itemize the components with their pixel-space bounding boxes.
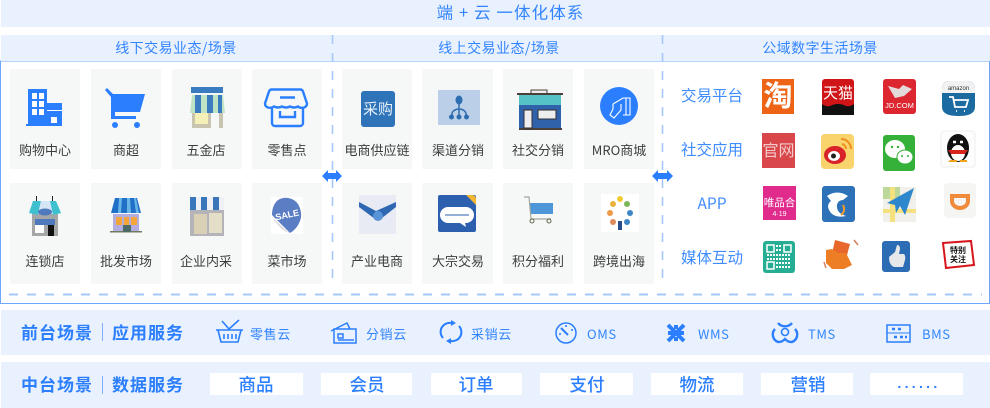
icon: didi bbox=[944, 183, 976, 218]
card: cross-border bbox=[584, 183, 654, 284]
icon: wechat bbox=[883, 135, 915, 171]
icon: jd bbox=[883, 79, 916, 114]
panel: public digital life bbox=[681, 73, 976, 277]
service: retail cloud bbox=[216, 320, 291, 343]
icon: jd: JD.COM bbox=[885, 101, 914, 110]
card: bulk trading bbox=[422, 183, 493, 284]
card: retail point: 零售点 bbox=[267, 140, 307, 159]
card: cross-border: 跨境出海 bbox=[593, 251, 645, 270]
icon: weibo bbox=[821, 134, 854, 169]
pill: more: ...... bbox=[897, 375, 941, 391]
pill: logistics: 物流 bbox=[680, 372, 714, 397]
card: vegetable market: SALE bbox=[274, 208, 300, 222]
icon: official site bbox=[762, 133, 795, 168]
icon: special follow bbox=[943, 241, 974, 268]
label: social apps: 社交应用 bbox=[681, 138, 743, 160]
service: purchasing cloud bbox=[441, 320, 512, 344]
icon: vip bbox=[763, 186, 796, 220]
card: industrial e-commerce bbox=[342, 183, 412, 284]
card: vegetable market: 菜市场 bbox=[267, 251, 307, 270]
title bar: 端 + 云 一体化体系 bbox=[437, 0, 584, 24]
icon: qq bbox=[941, 131, 975, 167]
card: wholesale market bbox=[91, 183, 161, 284]
card: social distribution: 社交分销 bbox=[512, 140, 564, 159]
service: bms bbox=[887, 324, 951, 343]
icon: phone shake bbox=[816, 233, 864, 277]
card: wholesale market: 批发市场 bbox=[100, 251, 152, 270]
card: points benefits bbox=[503, 183, 573, 284]
service: oms bbox=[556, 323, 617, 343]
icon: vip: 唯品合 bbox=[764, 195, 796, 210]
icon: special follow: 关注 bbox=[950, 254, 966, 265]
heading: data services: 数据服务 bbox=[112, 371, 184, 396]
card: industrial e-commerce: 产业电商 bbox=[351, 251, 403, 270]
panel: offline scenes bbox=[10, 69, 322, 284]
card: social distribution bbox=[503, 69, 573, 169]
label: trading platforms: 交易平台 bbox=[681, 84, 743, 106]
service: purchasing cloud: 采销云 bbox=[471, 324, 512, 343]
label: media interaction: 媒体互动 bbox=[681, 246, 743, 268]
pill: goods bbox=[210, 372, 303, 397]
card: supermarket: 商超 bbox=[113, 140, 139, 159]
icon: tmall bbox=[822, 79, 854, 115]
card: chain store bbox=[10, 183, 80, 284]
card: bulk trading: 大宗交易 bbox=[432, 251, 484, 270]
heading: offline: 线下交易业态/场景 bbox=[115, 38, 237, 58]
pill: logistics bbox=[651, 372, 743, 397]
card: supermarket bbox=[91, 69, 161, 169]
card: e-commerce supply chain: 采购 bbox=[363, 98, 393, 119]
card: chain store: 连锁店 bbox=[25, 251, 65, 270]
icon: official site: 官网 bbox=[762, 137, 795, 161]
panel: middle-office data services bbox=[1, 362, 990, 408]
pill: marketing: 营销 bbox=[790, 372, 826, 397]
pill: members bbox=[321, 372, 412, 397]
heading: front-office: 前台场景 bbox=[21, 319, 93, 344]
service: tms bbox=[773, 323, 836, 343]
heading: public: 公域数字生活场景 bbox=[762, 38, 878, 58]
service: tms: TMS bbox=[808, 324, 836, 343]
panel: front-office services bbox=[1, 310, 990, 355]
divider mark bbox=[102, 376, 103, 394]
card: MRO mall bbox=[584, 69, 654, 169]
card: hardware store bbox=[172, 69, 242, 169]
card: channel distribution: 渠道分销 bbox=[432, 140, 484, 159]
icon: qr code bbox=[763, 241, 795, 273]
heading: online: 线上交易业态/场景 bbox=[438, 38, 560, 58]
pill: orders bbox=[431, 372, 522, 397]
pill: more bbox=[870, 373, 963, 395]
service: distribution cloud: 分销云 bbox=[366, 324, 407, 343]
service: wms: WMS bbox=[698, 324, 730, 343]
service: retail cloud: 零售云 bbox=[250, 324, 291, 343]
service: bms: BMS bbox=[922, 324, 951, 343]
icon: thumbs up bbox=[882, 241, 910, 272]
icon: ctrip bbox=[822, 186, 855, 222]
service: oms: OMS bbox=[587, 324, 617, 343]
heading: application services: 应用服务 bbox=[112, 319, 184, 344]
card: enterprise purchasing: 企业内采 bbox=[180, 251, 232, 270]
icon: amazon bbox=[942, 81, 975, 116]
card: e-commerce supply chain bbox=[342, 69, 412, 169]
service: wms bbox=[668, 324, 730, 343]
icon: left double arrow bbox=[322, 170, 342, 182]
heading: middle-office: 中台场景 bbox=[21, 371, 93, 396]
icon: special follow: 特别 bbox=[950, 245, 966, 256]
card: vegetable market bbox=[252, 183, 322, 284]
card: MRO mall: MRO商城 bbox=[592, 140, 646, 159]
title bar bbox=[1, 0, 990, 27]
pill: payment bbox=[540, 372, 633, 397]
card: shopping centre bbox=[10, 69, 80, 169]
icon: map bbox=[883, 187, 916, 222]
card: points benefits: 积分福利 bbox=[512, 251, 564, 270]
icon: tmall: 天猫 bbox=[823, 82, 853, 103]
card: e-commerce supply chain: 电商供应链 bbox=[344, 140, 410, 159]
card: shopping centre: 购物中心 bbox=[19, 140, 71, 159]
icon: vip: 4·19 bbox=[772, 211, 787, 218]
label: app: APP bbox=[697, 192, 727, 214]
card: hardware store: 五金店 bbox=[186, 140, 226, 159]
pill: payment: 支付 bbox=[570, 372, 604, 397]
icon: right double arrow bbox=[652, 170, 673, 182]
card: channel distribution bbox=[422, 69, 493, 169]
pill: members: 会员 bbox=[350, 372, 384, 397]
service: distribution cloud bbox=[331, 323, 407, 343]
icon: amazon: amazon bbox=[948, 86, 969, 92]
card: enterprise purchasing bbox=[172, 183, 242, 284]
pill: goods: 商品 bbox=[238, 372, 274, 397]
divider mark bbox=[102, 323, 103, 341]
card: retail point bbox=[252, 69, 322, 169]
pill: marketing bbox=[761, 372, 853, 397]
pill: orders: 订单 bbox=[458, 372, 494, 397]
main frame bbox=[0, 35, 990, 304]
panel: online scenes bbox=[342, 69, 654, 284]
icon: taobao: 淘 bbox=[763, 73, 793, 115]
